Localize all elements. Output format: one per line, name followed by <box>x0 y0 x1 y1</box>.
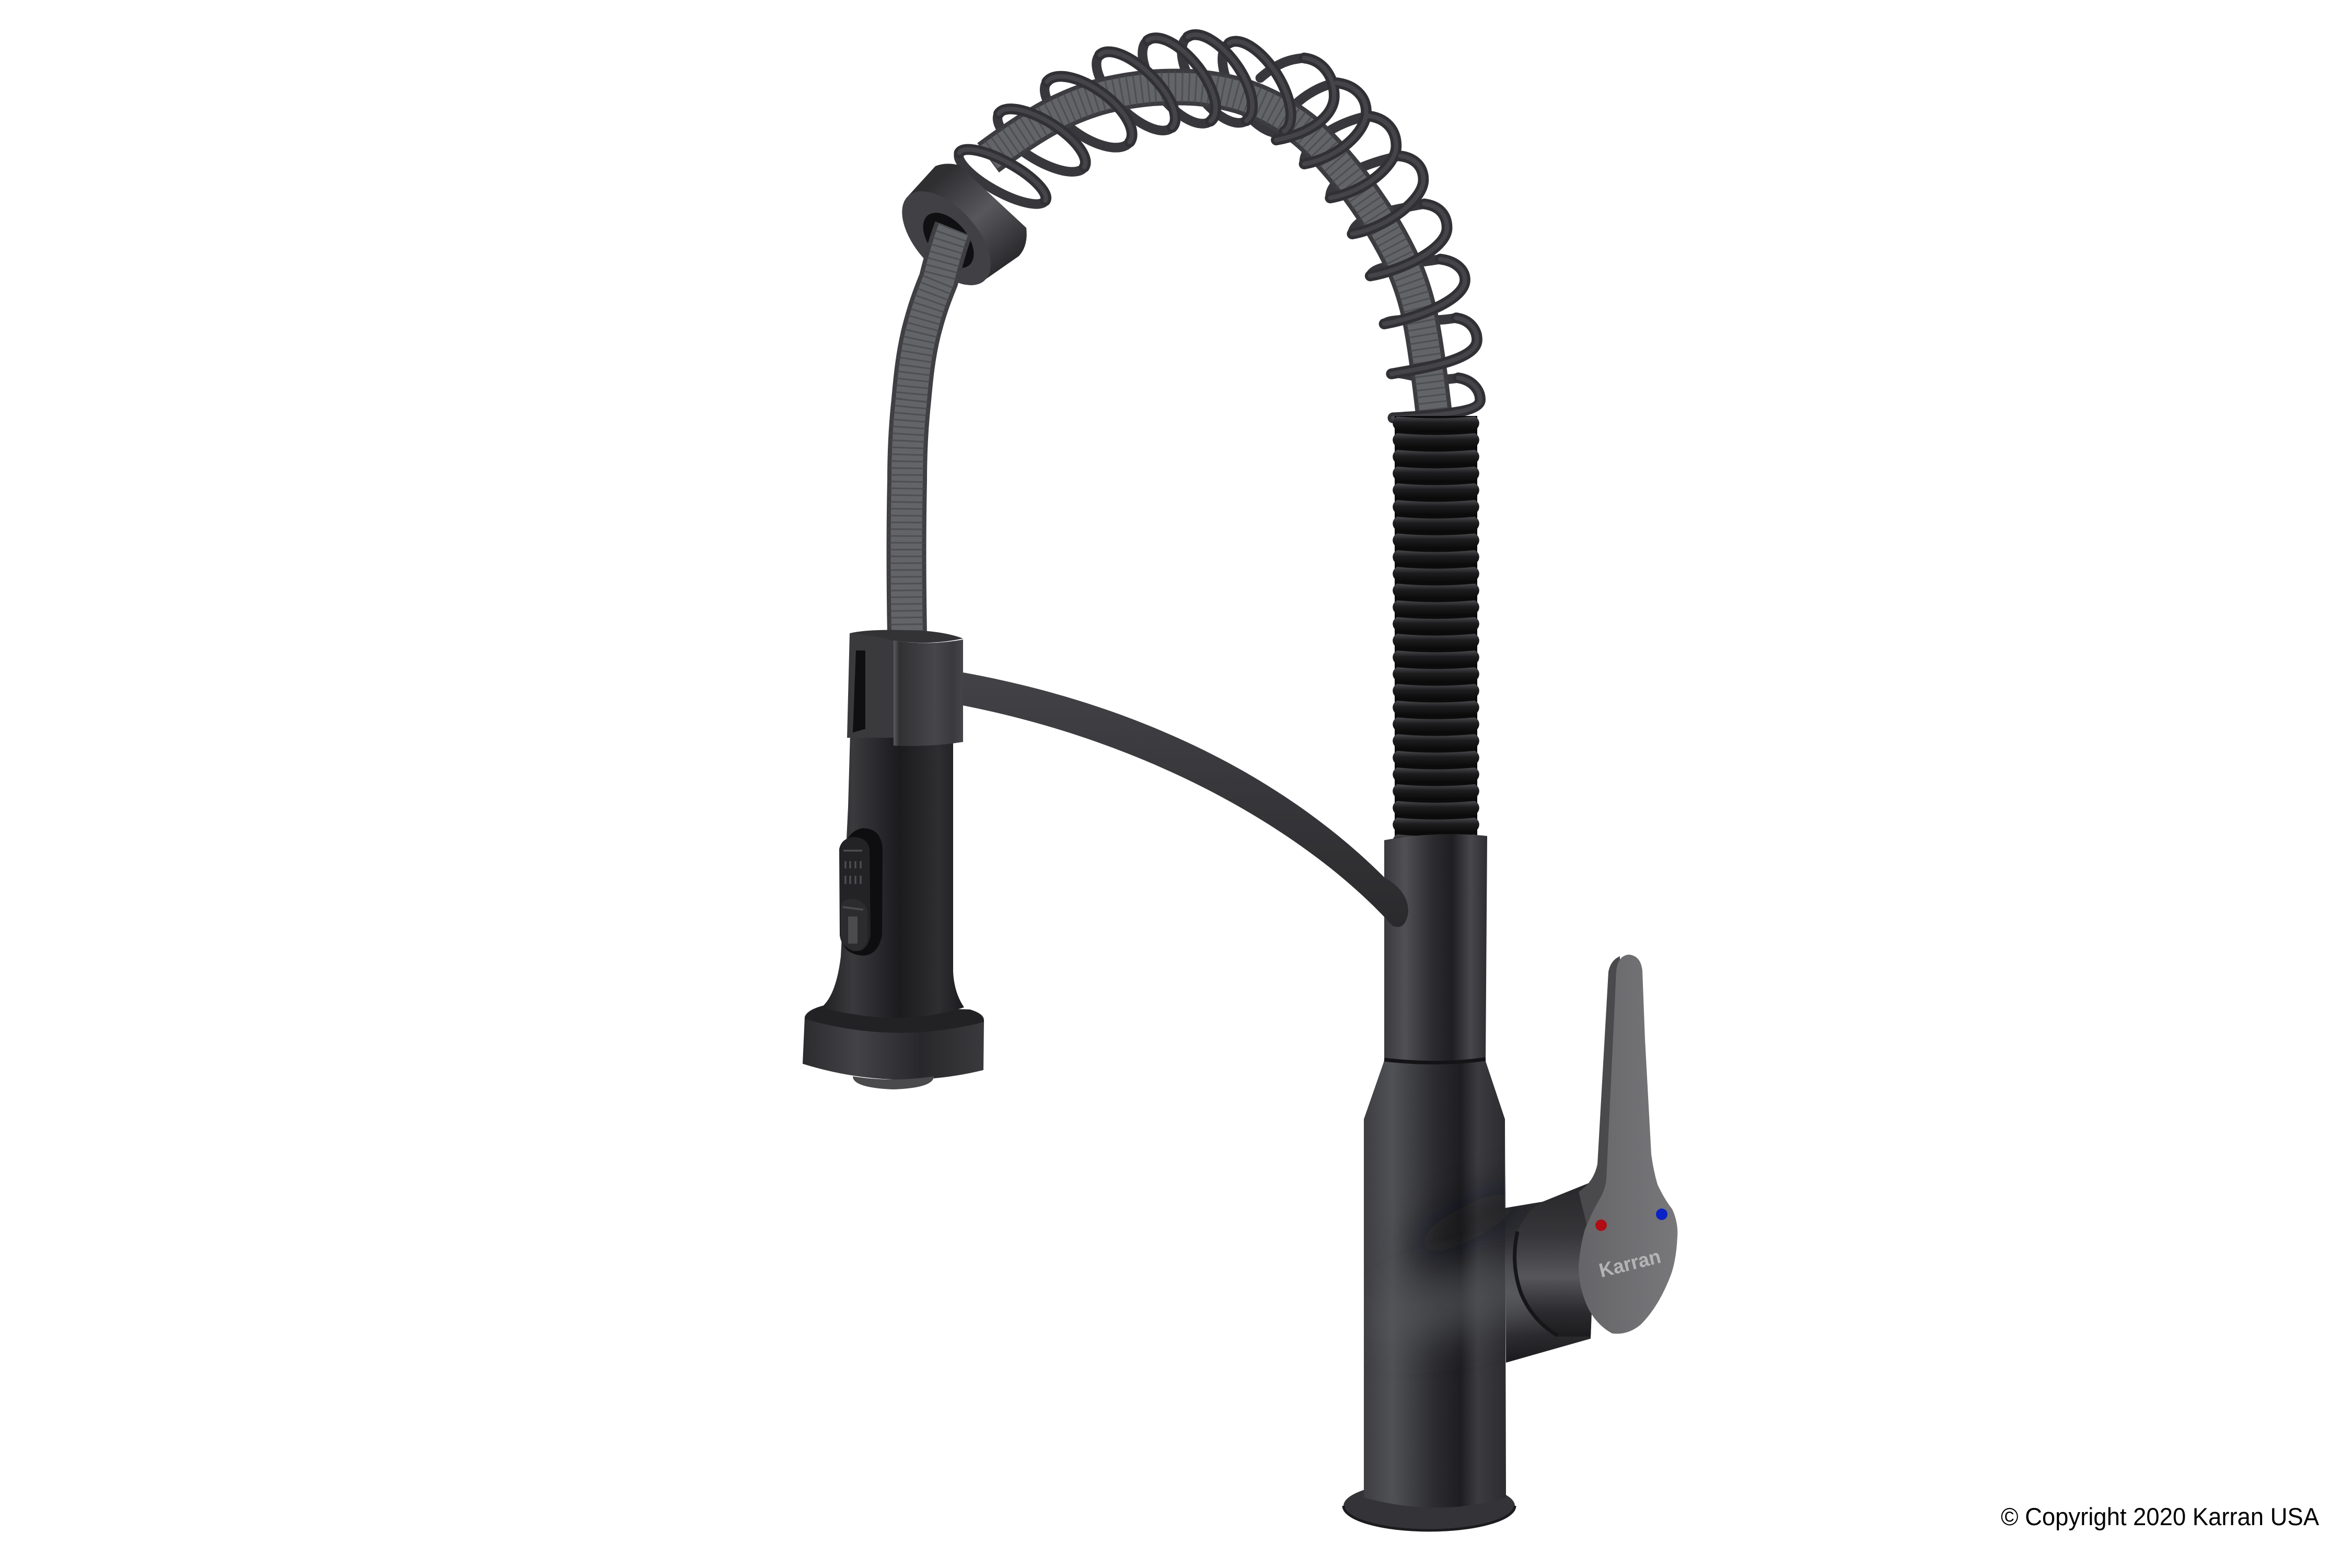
spray head <box>803 630 984 1089</box>
base flange <box>1343 1481 1515 1530</box>
braided hose: arch section <box>988 87 1434 418</box>
collar clamp <box>847 633 895 738</box>
handle side edge <box>1579 956 1620 1254</box>
canvas: product illustration <box>803 29 2319 1532</box>
cold indicator <box>1656 1209 1667 1220</box>
handle cylinder <box>1514 1180 1597 1337</box>
copyright notice: © Copyright 2020 Karran USA <box>2001 1503 2320 1530</box>
faucet body <box>1343 834 1597 1530</box>
tight coil sleeve <box>1390 416 1482 839</box>
lower body with shoulder <box>1364 1060 1506 1508</box>
cross tube <box>1505 1180 1597 1363</box>
curved support arm <box>963 672 1408 927</box>
lever handle <box>1579 955 1677 1334</box>
spring coil: front arcs over hose <box>959 23 1480 418</box>
upper spout tube <box>1384 834 1487 1064</box>
spray head body <box>821 734 964 1018</box>
spray head flared base <box>803 1005 984 1079</box>
brand mark: Karran <box>1597 1246 1663 1282</box>
hot indicator <box>1595 1219 1607 1231</box>
braided hose: drop to spray head <box>906 229 954 635</box>
handle front face <box>1579 955 1677 1334</box>
spring coil: rear arcs behind hose <box>952 37 1458 379</box>
tee junction shading <box>1365 1175 1572 1353</box>
spray mode switch <box>839 828 883 956</box>
tube joint seam <box>1384 1059 1486 1063</box>
hose guide ring <box>886 164 1027 301</box>
aerator nozzle <box>853 1076 934 1089</box>
faucet <box>803 23 1677 1530</box>
